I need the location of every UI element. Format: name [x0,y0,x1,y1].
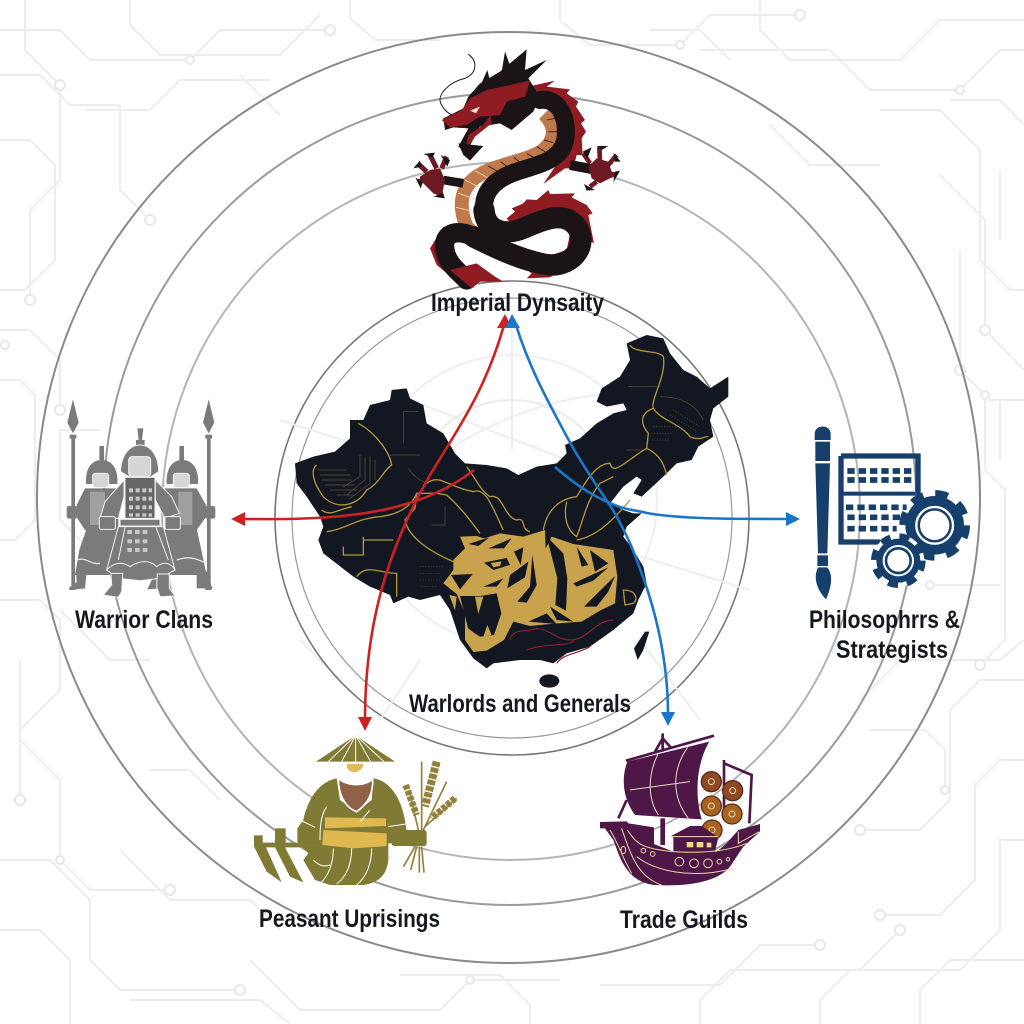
heading: Trade Guilds: Trade Guilds [620,906,748,934]
right warrior [147,446,215,589]
dragon tail tip [450,263,503,288]
ship main sail [624,742,709,819]
icon: dragon [413,49,621,288]
peasant sash [322,817,387,848]
arrow: blue between dynasty and trade guilds [505,314,675,726]
abacus [841,456,918,542]
ship coins [701,772,743,840]
armor plates [127,488,152,552]
arrow: red between dynasty and peasants [358,314,512,731]
large gear [903,494,966,557]
calligraphy brush [815,426,831,599]
left warrior [67,446,120,590]
arrow: red to warrior clans [231,470,474,526]
spears [67,399,214,590]
icon: peasant [254,735,457,885]
heading: Imperial Dynsaity: Imperial Dynsaity [431,289,604,317]
dragon right claw [570,146,621,191]
circuit detail on map [318,387,703,525]
dragon whisker [440,54,475,115]
peasant hand and rake [254,828,320,882]
icon: brush, abacus and gears [815,426,966,599]
dragon left claw [413,153,463,198]
heading: Warlords and Generals: Warlords and Generals [409,690,631,718]
gold border veins [313,345,708,605]
arrow: blue to philosophers [555,467,800,526]
heading: Warrior Clans: Warrior Clans [75,606,213,634]
tiger nose and eye [451,574,473,589]
peasant fist [392,830,427,846]
map of China with tiger [295,335,728,688]
small gear [872,535,924,587]
ship hull [600,821,760,886]
island: Hainan [539,674,559,688]
heading: Peasant Uprisings: Peasant Uprisings [259,905,440,933]
dragon body [445,100,581,280]
arrows [231,314,800,731]
tiger stripes [468,537,615,624]
wheat bundle [403,762,457,873]
heading: Philosophrrs & Strategists [809,606,960,664]
peasant robe [297,778,408,885]
icon: warrior clans [67,399,215,597]
tiger mouth [460,593,501,637]
icon: trade ship [600,733,760,886]
dragon belly [462,114,553,242]
island: Taiwan [634,632,649,660]
heading: Philosophrrs & Strategists: Philosophrrs & [809,606,960,634]
dragon red mane [430,81,594,288]
center warrior [99,428,180,597]
tiger [443,530,617,652]
ship cabin [670,826,718,852]
ship mast and rigging [618,733,752,845]
red southern veins [510,620,613,663]
peasant hat [316,735,395,773]
dragon head [443,49,547,150]
map silhouette [295,335,728,668]
heading: Philosophrrs & Strategists: Strategists [836,636,948,664]
